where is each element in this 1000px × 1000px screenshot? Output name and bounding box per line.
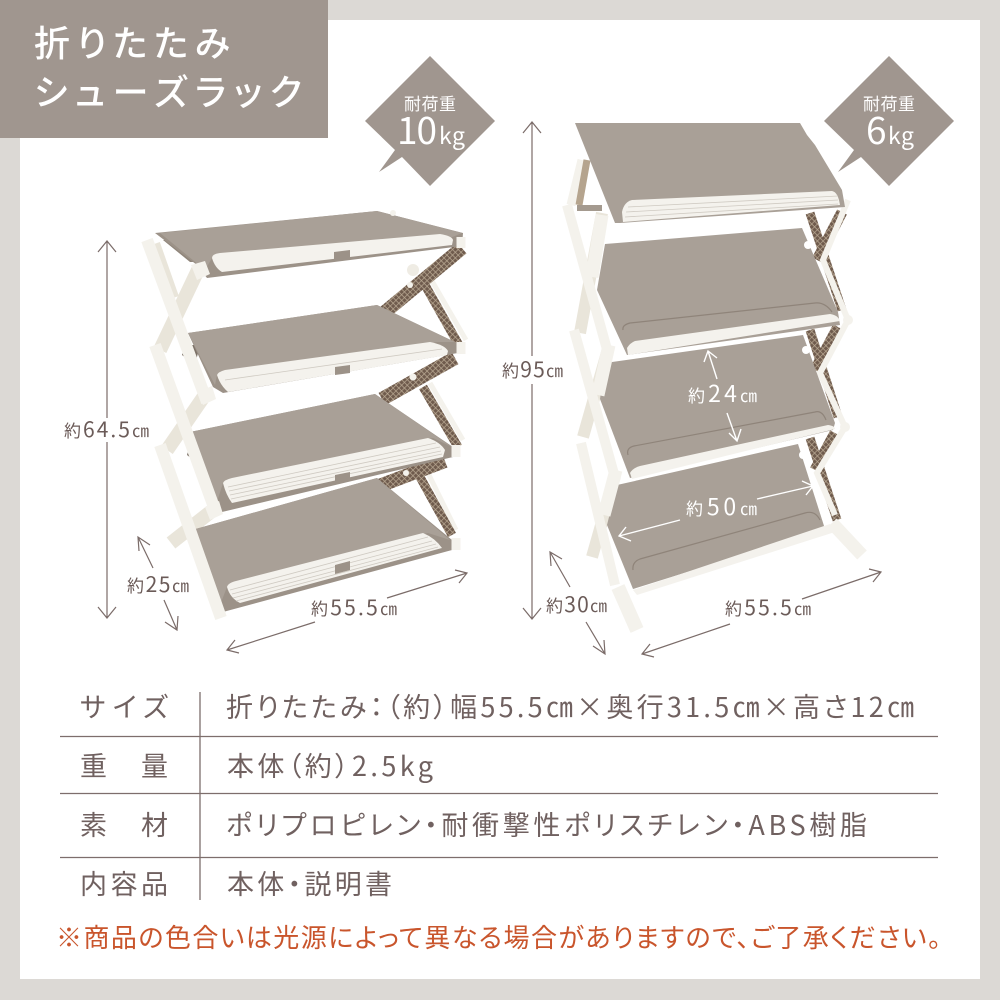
right rack: shelf 3 (600, 335, 835, 479)
left rack: shelf 4 (192, 478, 452, 612)
right rack: foot (832, 523, 862, 555)
title panel (0, 0, 328, 138)
right rack: back braces (571, 160, 615, 557)
dimension: shelf width 50cm: 約50㎝ (686, 488, 757, 522)
row: size: サイズ (80, 686, 168, 725)
right rack: shelf 2 (597, 228, 840, 355)
right rack: lattice legs (810, 200, 853, 520)
title panel: シューズラック (34, 64, 302, 116)
row: weight: 本体（約）2.5kg (227, 745, 433, 784)
dimension: right width (642, 569, 881, 657)
dimension: right depth: 約30㎝ (546, 589, 607, 619)
badge: load 6kg (824, 56, 954, 186)
dimension: shelf gap 24cm: 約24㎝ (688, 375, 757, 409)
dimension: left width: 約55.5㎝ (311, 592, 397, 622)
row: material: ポリプロピレン・耐衝撃性ポリスチレン・ABS樹脂 (226, 804, 867, 843)
badge: load 10kg: 耐荷重 (404, 90, 456, 115)
table rules (60, 692, 938, 900)
dimension: right height (502, 122, 563, 619)
dimension: left depth: 約25㎝ (127, 569, 189, 599)
dimension: left height: 約64.5㎝ (64, 414, 149, 444)
row: contents (80, 863, 392, 902)
right rack: shelf 4 (607, 444, 835, 595)
title panel: 折りたたみ (34, 15, 230, 67)
dimension: shelf gap 24cm (688, 351, 757, 441)
dimension: right width: 約55.5㎝ (725, 592, 811, 622)
note: ※商品の色合いは光源によって異なる場合がありますので、ご了承ください。 (56, 918, 941, 955)
dimension: left depth (127, 537, 189, 630)
dimension: right height: 約95㎝ (502, 354, 563, 384)
dimension: shelf width 50cm (619, 481, 813, 541)
row: weight: 重 量 (80, 745, 168, 784)
row: weight (80, 745, 433, 784)
dimension: left height (64, 241, 149, 618)
left rack: rear shelf supports (157, 240, 215, 465)
badge: load 10kg: kg (439, 117, 465, 151)
left rack: 4 tiers (147, 210, 466, 618)
dimension: left width (227, 570, 467, 653)
right rack: 4 tiers (567, 123, 862, 630)
badge: load 10kg (365, 56, 495, 186)
badge: load 10kg: 10 (397, 101, 437, 155)
row: contents: 本体・説明書 (227, 863, 392, 902)
badge: load 6kg: 耐荷重 (863, 90, 915, 115)
left rack: shelf 2 (188, 305, 458, 393)
badge: load 6kg: kg (888, 117, 914, 151)
specification table (60, 686, 938, 902)
left rack: cross braces (160, 270, 213, 543)
row: contents: 内容品 (80, 863, 168, 902)
left rack: shelf 3 (190, 394, 453, 512)
left rack: shelf 1 (155, 210, 463, 278)
left rack: white frame bars (147, 237, 461, 618)
left rack: right lattice legs (379, 248, 466, 535)
dimension: right depth (546, 552, 607, 654)
right rack: shelf 1 (575, 123, 845, 223)
badge: load 6kg: 6 (866, 101, 887, 155)
row: size: 折りたたみ：（約）幅55.5㎝×奥行31.5㎝×高さ12㎝ (226, 686, 914, 725)
right rack: white frame bars (567, 205, 637, 630)
row: material: 素 材 (80, 804, 168, 843)
